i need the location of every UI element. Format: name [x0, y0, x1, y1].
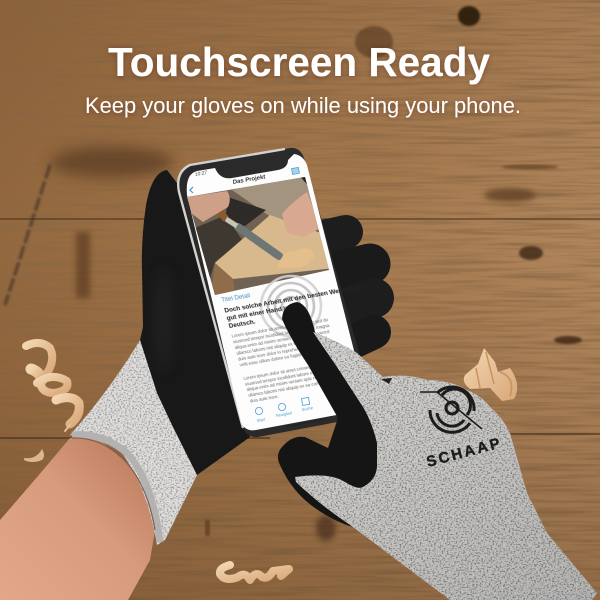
article text: Deutsch. — [228, 318, 257, 330]
share icon — [292, 167, 299, 174]
article text: Lorem ipsum dolor sit amet consectetur elit sed do — [243, 359, 341, 381]
article text: velit esse cillum dolore eu fugiat nulla pariatur — [239, 347, 328, 367]
tab bar: Start — [256, 416, 266, 423]
tab bar: Neuigkeit — [275, 410, 293, 418]
article text: aliqua enim ad minim veniam quis nostrud exercit — [234, 329, 331, 350]
article photo — [187, 177, 329, 295]
chisel — [238, 227, 279, 256]
article text: aliqua enim ad minim veniam quis nostrud exercit — [246, 371, 343, 392]
article text: Doch solche Arbeit mit den besten Werkzeugen — [224, 283, 368, 314]
right hand — [282, 192, 321, 237]
status time: 10:27 — [195, 170, 208, 178]
right glove grey knit — [280, 325, 600, 600]
phone — [176, 148, 360, 438]
phone silver edge — [178, 149, 285, 428]
article text: Lorem ipsum dolor sit amet consectetur elit sed do — [231, 317, 329, 338]
back chevron — [190, 187, 193, 193]
article text: eiusmod tempor incididunt labore et dolore magna — [233, 323, 330, 344]
touch ripple rings — [261, 276, 321, 336]
left glove knit wrist — [70, 340, 197, 545]
finger gap — [381, 378, 392, 384]
article text — [221, 273, 393, 404]
shaving right — [464, 348, 517, 401]
wood block — [215, 215, 335, 279]
shaving small — [24, 449, 44, 462]
left arm — [0, 437, 158, 600]
left hand — [187, 191, 230, 222]
article text: ullamco laboris nisi aliquip ex ea commodo sed — [236, 335, 328, 356]
right hand glove — [278, 302, 600, 600]
right glove black coating — [278, 302, 382, 527]
tab bar — [255, 397, 314, 423]
article text: eiusmod tempor incididunt labore et dolore magna — [244, 365, 342, 386]
subtitle: Keep your gloves on while using your phone. — [85, 93, 521, 118]
tab bar: Suche — [301, 405, 314, 412]
article text: gut mit einer Hand in — [226, 305, 290, 322]
article text: duis aute irure. — [249, 394, 279, 404]
nav title: Das Projekt — [233, 174, 266, 186]
title: Touchscreen Ready — [108, 39, 490, 85]
left glove fingers behind phone — [328, 232, 374, 341]
article text: ullamco laboris nisi aliquip ex ea commodo sed — [248, 378, 340, 398]
wood curls — [277, 248, 314, 268]
shaving bottom — [220, 565, 289, 580]
article text: Titel Detail — [221, 292, 251, 304]
home indicator — [285, 419, 324, 427]
left glove black palm — [140, 170, 250, 475]
phone screen — [187, 154, 366, 430]
phone frame — [178, 148, 374, 437]
article text: duis aute irure dolor in reprehenderit voluptate — [237, 341, 328, 362]
shaving left curl — [26, 343, 79, 431]
SCHAAP logo mark — [420, 387, 482, 432]
SCHAAP wordmark: SCHAAP — [425, 434, 504, 471]
